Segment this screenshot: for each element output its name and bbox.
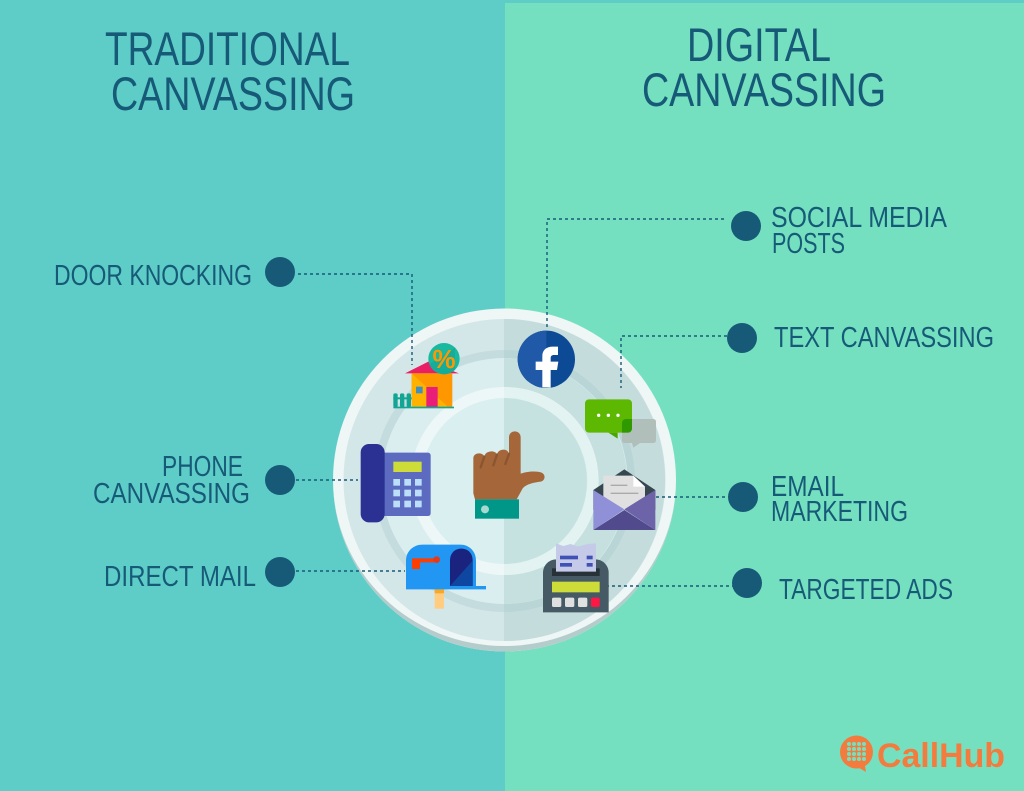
label: direct mail: DIRECT MAIL — [104, 561, 256, 593]
heading: traditional canvassing: CANVASSING — [111, 67, 355, 120]
heading: traditional canvassing — [105, 22, 355, 120]
icon: envelope — [593, 469, 655, 530]
label: targeted ads — [732, 568, 953, 606]
label: email marketing — [728, 471, 908, 528]
icon: chat bubbles — [585, 399, 656, 448]
central circle — [333, 308, 676, 652]
icons layer — [361, 331, 656, 612]
label: email marketing: EMAIL — [771, 471, 844, 503]
heading: digital canvassing: CANVASSING — [642, 63, 886, 116]
label: email marketing: MARKETING — [771, 496, 908, 528]
label: phone canvassing — [93, 451, 295, 510]
connector: direct mail — [296, 570, 405, 572]
label: phone canvassing: CANVASSING — [93, 478, 250, 510]
connector: email marketing — [656, 496, 725, 498]
panel: digital canvassing background — [505, 3, 1024, 791]
label: targeted ads: TARGETED ADS — [779, 574, 953, 606]
connector: phone canvassing — [296, 479, 358, 481]
label: door knocking: DOOR KNOCKING — [54, 260, 252, 292]
icon: mailbox — [406, 545, 486, 609]
icon: house with percent badge — [393, 343, 460, 408]
heading: digital canvassing: DIGITAL — [687, 18, 831, 71]
connector: door knocking — [298, 274, 412, 365]
label: social media posts: POSTS — [772, 228, 845, 260]
icon: pointing hand — [473, 431, 545, 519]
logo: CallHub: CallHub — [877, 737, 1005, 775]
label: phone canvassing: PHONE — [162, 451, 243, 483]
label: social media posts: SOCIAL MEDIA — [771, 202, 948, 234]
connector: text canvassing — [621, 336, 727, 388]
connector: targeted ads — [606, 585, 733, 587]
icon: facebook — [518, 331, 575, 388]
heading: digital canvassing — [642, 18, 886, 116]
heading: traditional canvassing: TRADITIONAL — [105, 22, 350, 75]
icon: house with percent badge: % — [432, 344, 456, 374]
icon: desk phone — [361, 444, 431, 522]
connector: social media posts — [547, 219, 724, 330]
icon: fax machine — [543, 543, 609, 612]
label: social media posts — [731, 202, 948, 260]
